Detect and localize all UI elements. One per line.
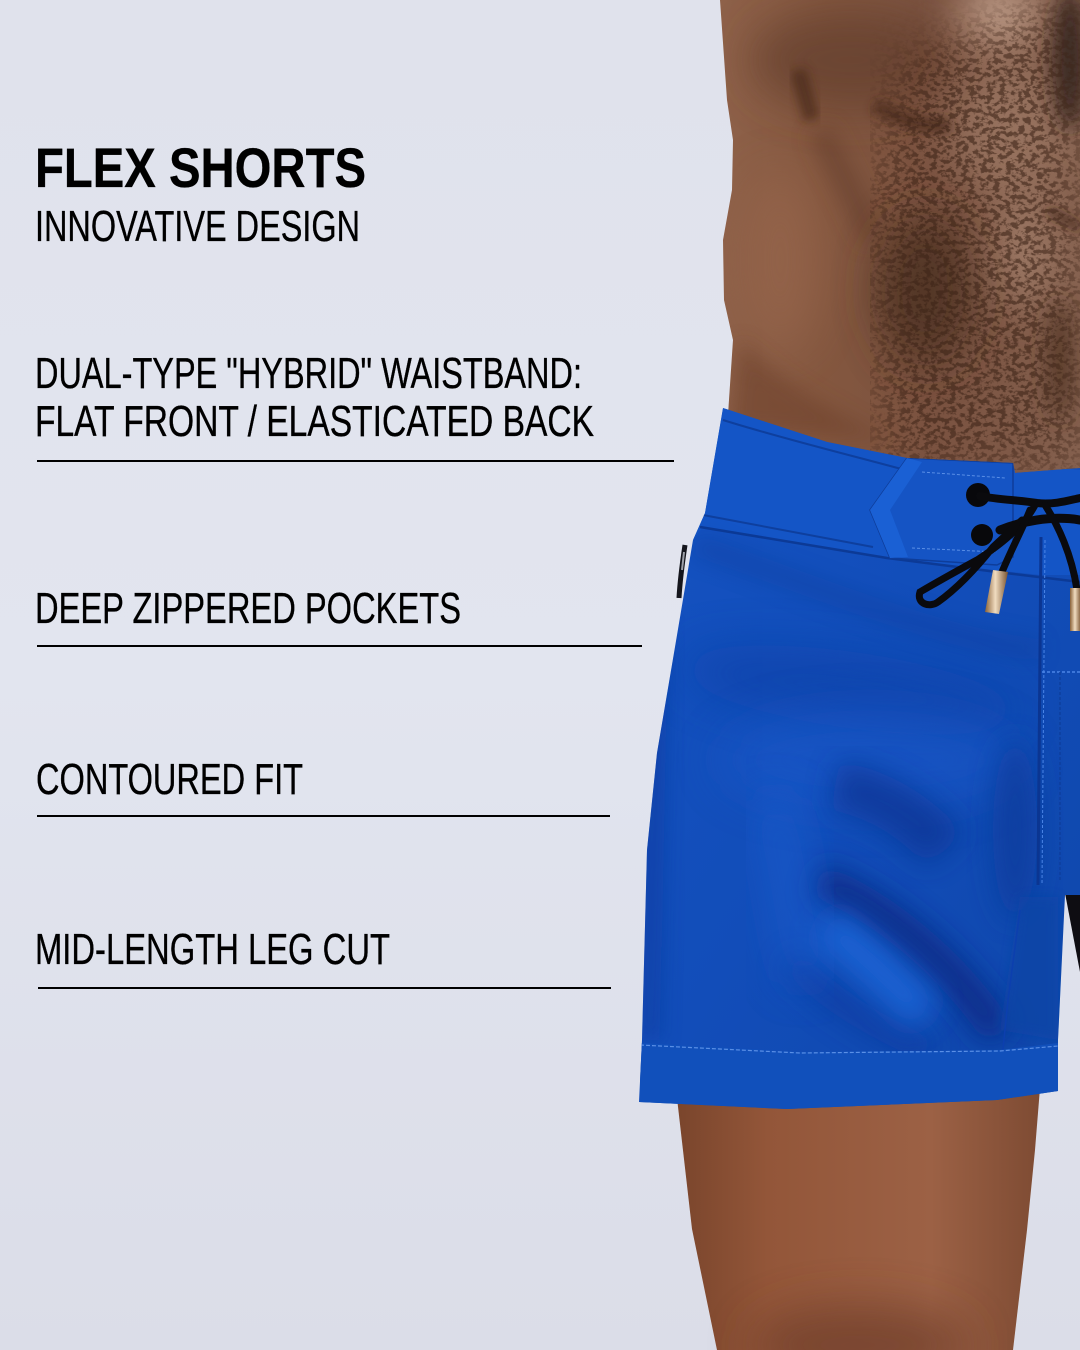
subtitle: INNOVATIVE DESIGN [35, 202, 360, 251]
chest and stomach hair [870, 0, 1080, 470]
waistband [693, 408, 1080, 575]
metal cord tips [985, 570, 1008, 614]
feature: pockets: DEEP ZIPPERED POCKETS [35, 584, 461, 633]
feature: fit: CONTOURED FIT [36, 755, 303, 804]
leg [677, 1088, 1040, 1350]
waistband tab [870, 458, 1013, 565]
title: FLEX SHORTS [35, 136, 366, 199]
fly [1038, 537, 1041, 885]
side seam [1003, 950, 1015, 1042]
feature: leg cut: MID-LENGTH LEG CUT [35, 925, 390, 974]
feature: waistband: DUAL-TYPE "HYBRID" WAISTBAND: [35, 349, 582, 398]
feature: waistband [35, 349, 674, 462]
shorts [630, 400, 1080, 1120]
title [35, 136, 366, 251]
zipper pocket [679, 545, 685, 598]
torso [715, 0, 1080, 500]
eyelets and drawstring [919, 483, 1080, 631]
inner leg dark [1065, 893, 1080, 972]
photo: model wearing blue shorts [630, 0, 1080, 1350]
feature: waistband: FLAT FRONT / ELASTICATED BACK [35, 397, 594, 446]
fabric shadows [640, 620, 668, 1040]
hem [640, 1043, 1058, 1110]
